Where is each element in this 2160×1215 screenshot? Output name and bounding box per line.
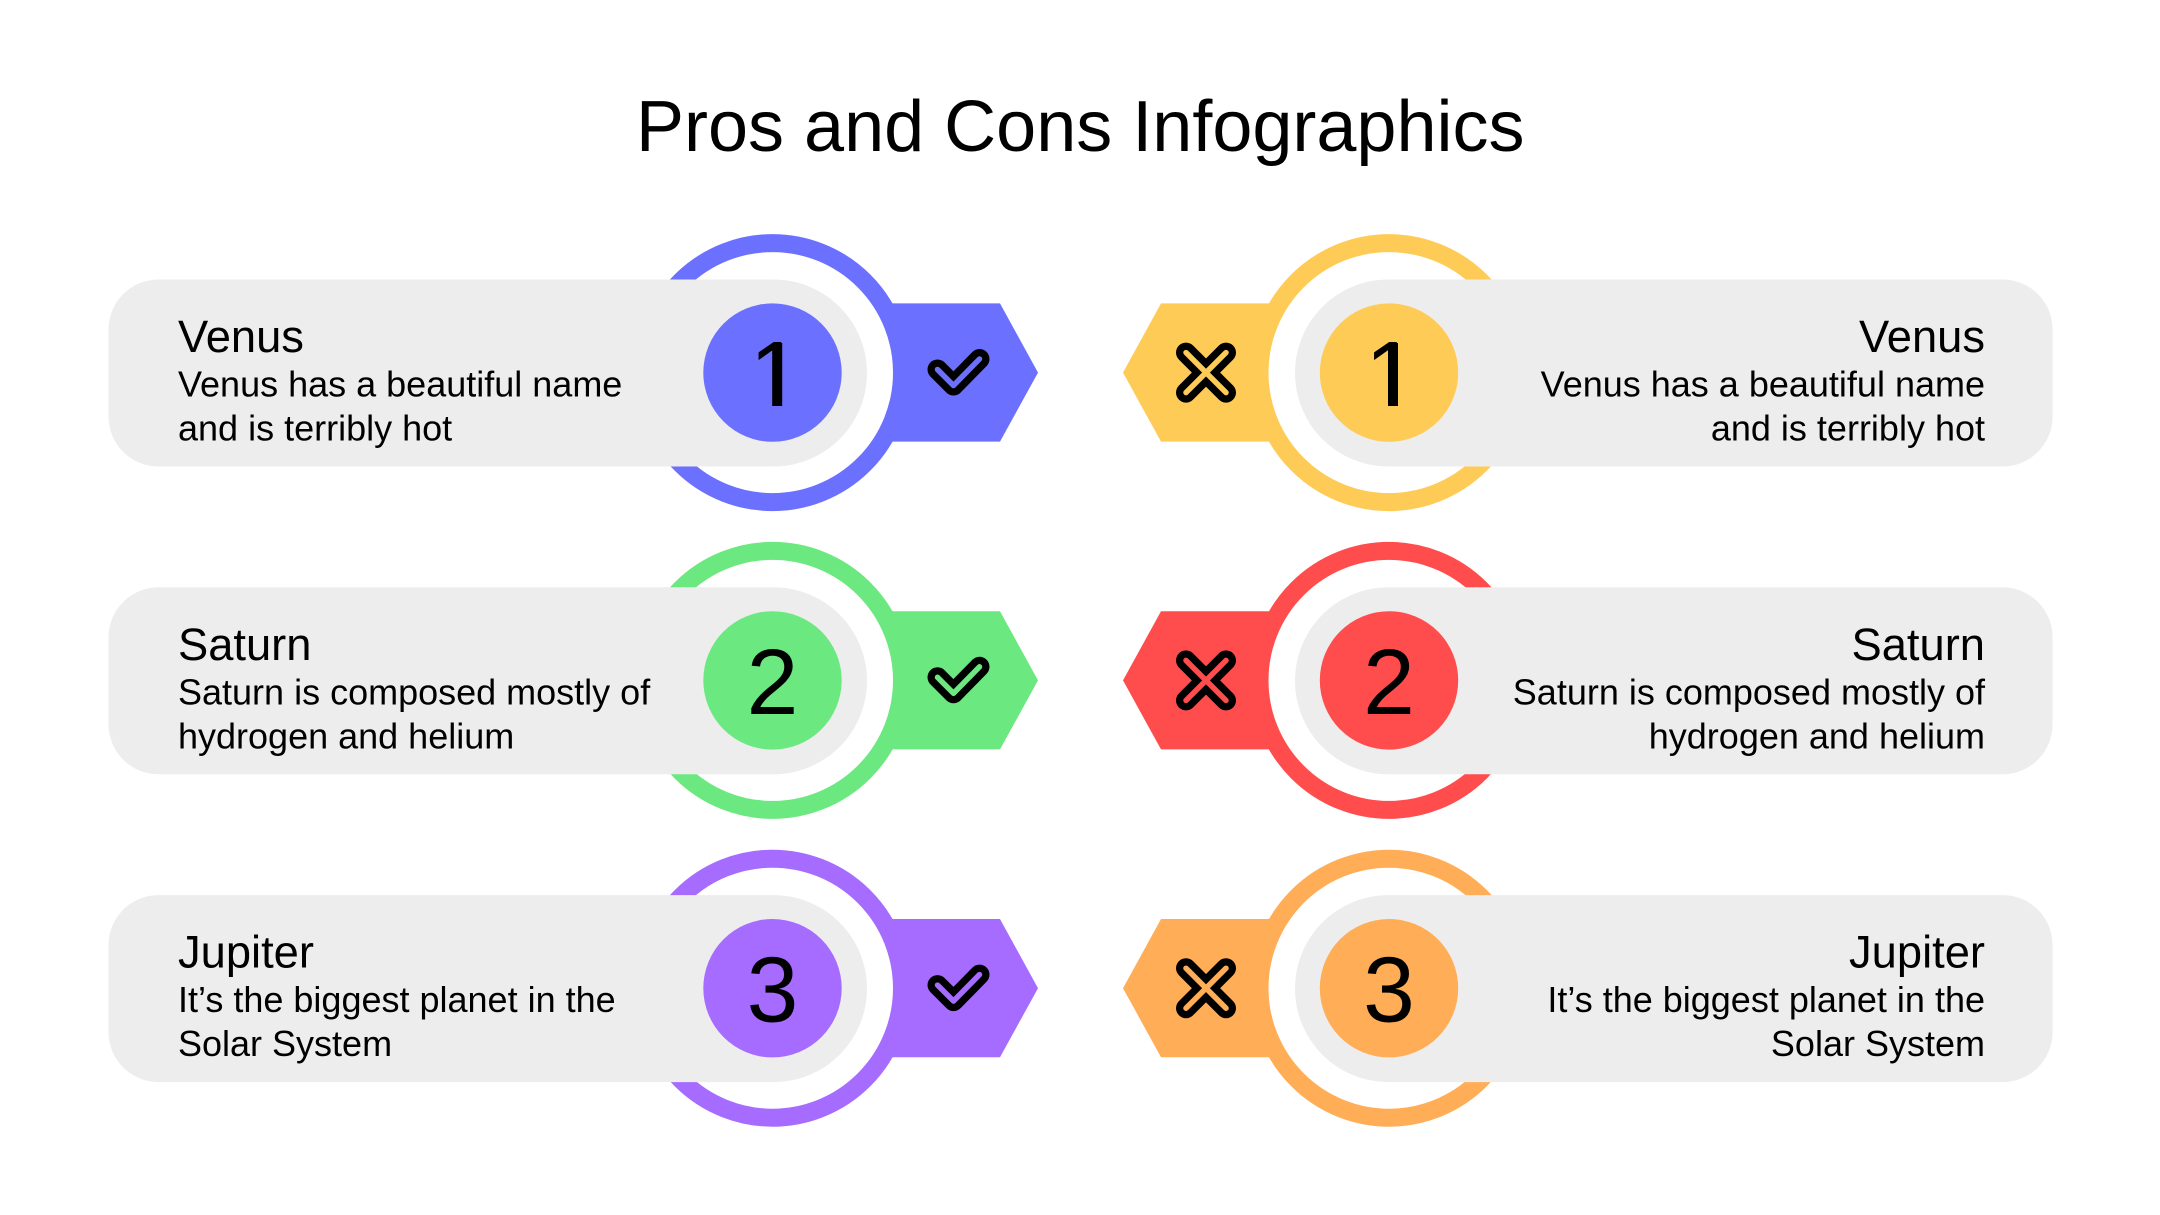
description: Venus: Venus has a beautiful name	[178, 364, 622, 404]
text pill: con 1	[1295, 280, 2053, 466]
panel: pro 3 Jupiter	[108, 859, 1038, 1118]
arrow tag: pro 2	[772, 611, 1038, 749]
number badge: con 2: 2	[1363, 630, 1415, 734]
panel: pro 2 Saturn	[108, 551, 1038, 810]
panel: pro 1 Venus	[108, 243, 1038, 502]
heading: Jupiter: Jupiter	[1849, 927, 1985, 978]
number badge: pro 1: 1	[750, 322, 801, 426]
description: Saturn: Saturn is composed mostly of	[1513, 671, 1986, 712]
ring: con 3	[1260, 859, 1518, 1118]
icon: check	[938, 359, 980, 386]
heading: Saturn: Saturn	[178, 619, 311, 670]
description: Jupiter: Solar System	[1771, 1023, 1985, 1064]
number badge: con 3	[1320, 919, 1458, 1057]
number badge: con 1	[1320, 303, 1458, 442]
number badge: con 2	[1320, 611, 1458, 750]
description: Saturn: hydrogen and helium	[1649, 715, 1985, 756]
heading: Saturn: Saturn	[1852, 619, 1985, 670]
ring: pro 2	[643, 551, 902, 810]
description: Jupiter: It’s the biggest planet in the	[178, 979, 616, 1020]
panel: con 3 Jupiter	[1123, 859, 2053, 1118]
arrow tag: pro 3	[772, 919, 1038, 1057]
number badge: con 1: 1	[1365, 322, 1417, 426]
ring: pro 3	[643, 859, 902, 1118]
title: Pros and Cons Infographics	[636, 87, 1525, 167]
number badge: pro 2: 2	[747, 630, 798, 734]
text pill: con 3	[1295, 895, 2053, 1082]
text pill: pro 2	[108, 587, 867, 774]
icon: check	[938, 667, 980, 693]
icon: cross	[1186, 968, 1226, 1008]
panel: con 2 Saturn	[1123, 551, 2053, 810]
text pill: pro 3	[108, 895, 867, 1082]
description: Jupiter: It’s the biggest planet in the	[1547, 979, 1985, 1020]
arrow tag: pro 1	[772, 303, 1038, 442]
arrow tag: con 2	[1123, 611, 1389, 749]
icon: cross	[1186, 660, 1226, 700]
icon: cross	[1186, 353, 1226, 393]
icon: check	[938, 975, 980, 1001]
description: Saturn: hydrogen and helium	[178, 715, 514, 756]
number badge: pro 2	[703, 611, 842, 750]
description: Venus: Venus has a beautiful name	[1541, 364, 1985, 404]
heading: Venus: Venus	[178, 311, 304, 362]
description: Jupiter: Solar System	[178, 1023, 392, 1064]
ring: con 1	[1260, 243, 1518, 502]
number badge: pro 1	[703, 303, 842, 442]
number badge: pro 3: 3	[747, 938, 798, 1042]
arrow tag: con 3	[1123, 919, 1389, 1057]
text pill: pro 1	[108, 280, 867, 466]
text pill: con 2	[1295, 587, 2053, 774]
description: Venus: and is terribly hot	[1711, 408, 1985, 448]
number badge: pro 3	[703, 919, 842, 1057]
arrow tag: con 1	[1123, 303, 1389, 442]
heading: Venus: Venus	[1859, 311, 1985, 362]
panel: con 1 Venus	[1123, 243, 2053, 502]
heading: Jupiter: Jupiter	[178, 927, 314, 978]
ring: pro 1	[643, 243, 902, 502]
description: Saturn: Saturn is composed mostly of	[178, 671, 651, 712]
ring: con 2	[1260, 551, 1518, 810]
number badge: con 3: 3	[1363, 938, 1415, 1042]
description: Venus: and is terribly hot	[178, 408, 452, 448]
